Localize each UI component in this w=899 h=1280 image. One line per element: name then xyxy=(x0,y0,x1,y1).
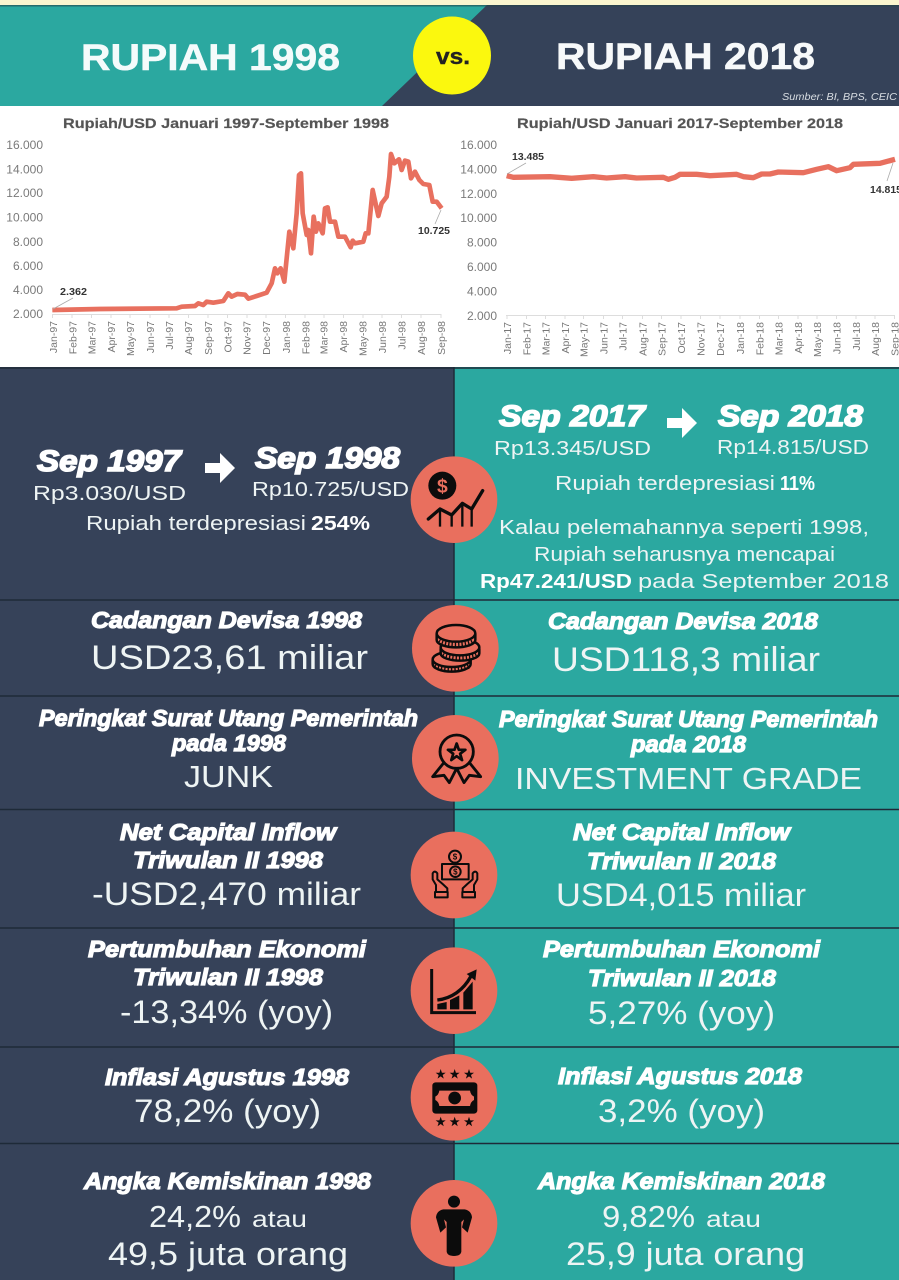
row: economic growth 1998: Triwulan II 1998 xyxy=(133,964,323,990)
y axis labels: 4.000 xyxy=(467,284,497,298)
x axis labels: Oct-17 xyxy=(676,322,688,354)
line chart: Rupiah/USD 2017-2018 xyxy=(460,115,899,357)
x axis labels: Dec-17 xyxy=(715,322,727,356)
callout: 10.725 xyxy=(418,210,450,237)
x axis labels xyxy=(48,321,448,356)
depreciation text: 11% xyxy=(780,473,815,495)
depreciation text xyxy=(86,513,370,535)
x axis labels: Jan-98 xyxy=(281,321,293,353)
row: reserves 2018: USD118,3 miliar xyxy=(552,641,820,679)
arrow xyxy=(667,408,697,438)
x axis labels: Jun-97 xyxy=(145,321,157,353)
row: capital inflow 1998: -USD2,470 miliar xyxy=(92,876,361,912)
row: poverty 1998: atau xyxy=(252,1206,307,1232)
row: reserves 1998: USD23,61 miliar xyxy=(91,639,368,677)
x axis labels: Aug-18 xyxy=(870,322,882,356)
callout: 10.725: 10.725 xyxy=(418,226,450,237)
row: poverty 1998: 49,5 juta orang xyxy=(108,1236,348,1272)
callout: 2.362 xyxy=(53,287,87,309)
row: reserves 2018: Cadangan Devisa 2018 xyxy=(548,608,818,634)
scenario text xyxy=(480,517,889,593)
row: debt rating 2018: Peringkat Surat Utang Pemerintah xyxy=(499,706,878,732)
x axis labels: Jul-18 xyxy=(851,322,863,351)
y axis labels: 8.000 xyxy=(13,235,43,249)
row: debt rating 1998: JUNK xyxy=(184,759,273,794)
x axis labels: Jan-97 xyxy=(48,321,60,353)
heading: Sep 2017: Sep 2017 xyxy=(499,400,646,433)
arrow xyxy=(205,453,235,483)
x axis labels: Dec-97 xyxy=(261,321,273,355)
x axis labels: Feb-18 xyxy=(754,322,766,355)
x axis labels: Mar-18 xyxy=(774,322,786,355)
data line xyxy=(52,154,442,310)
row: debt rating 1998 xyxy=(39,705,418,794)
callout: 13.485: 13.485 xyxy=(512,152,544,163)
chart title: Rupiah/USD Januari 2017-September 2018 xyxy=(517,115,843,131)
row: poverty 2018: 25,9 juta orang xyxy=(566,1236,805,1272)
row: debt rating 2018: INVESTMENT GRADE xyxy=(515,761,862,796)
icon: hands holding money: $ xyxy=(453,868,458,877)
row: capital inflow 2018 xyxy=(556,819,806,913)
x axis labels: Jun-17 xyxy=(598,322,610,354)
row: capital inflow 1998: Net Capital Inflow xyxy=(120,819,338,845)
row: capital inflow 1998: Triwulan II 1998 xyxy=(133,847,323,873)
y axis labels: 10.000 xyxy=(6,210,43,224)
row: debt rating 1998: Peringkat Surat Utang Pemerintah xyxy=(39,705,418,731)
x axis labels: May-18 xyxy=(812,322,824,357)
row: poverty 2018 xyxy=(537,1168,825,1272)
x axis labels: Sep-97 xyxy=(203,321,215,355)
row: debt rating 2018 xyxy=(499,706,878,796)
row: economic growth 1998: Pertumbuhan Ekonomi xyxy=(88,936,367,962)
y axis labels: 14.000 xyxy=(6,162,43,176)
y axis labels xyxy=(6,138,43,321)
icon: person with hands on hips xyxy=(411,1180,497,1267)
depreciation text: Rupiah terdepresiasi xyxy=(555,473,775,495)
header band xyxy=(0,5,899,106)
icon: hands holding money: $ xyxy=(453,852,458,861)
title: Rupiah 1998: RUPIAH 1998 xyxy=(81,37,340,78)
x axis labels: Jun-98 xyxy=(377,321,389,353)
icon: hands holding money xyxy=(411,832,497,918)
x axis labels: Mar-97 xyxy=(86,321,98,354)
scenario text: Rp47.241/USD xyxy=(480,571,632,593)
rate 1997: Rp3.030/USD xyxy=(33,483,186,505)
rate 2017: Rp13.345/USD xyxy=(494,438,651,460)
y axis labels: 14.000 xyxy=(460,162,497,176)
y axis labels: 4.000 xyxy=(13,283,43,297)
x axis labels: Oct-97 xyxy=(222,321,234,353)
x axis labels: Feb-17 xyxy=(522,322,534,355)
row: poverty 2018: atau xyxy=(706,1206,761,1232)
y axis labels: 12.000 xyxy=(6,186,43,200)
icon: award ribbon with star xyxy=(412,715,499,802)
depreciation text: 254% xyxy=(311,513,370,535)
row: poverty 2018: Angka Kemiskinan 2018 xyxy=(537,1168,825,1194)
row: debt rating 1998: pada 1998 xyxy=(171,730,286,756)
row: capital inflow 1998 xyxy=(92,819,361,912)
rate 2018: Rp14.815/USD xyxy=(717,437,869,459)
x axis labels: Feb-98 xyxy=(300,321,312,354)
row: inflation 2018: Inflasi Agustus 2018 xyxy=(558,1063,802,1089)
scenario text: pada September 2018 xyxy=(638,571,889,593)
icon: stack of coins xyxy=(412,605,499,692)
row: capital inflow 2018: Triwulan II 2018 xyxy=(587,848,776,874)
line chart: Rupiah/USD 1997-1998 xyxy=(6,115,450,356)
callout: 13.485 xyxy=(507,152,544,174)
panel: 2018 background xyxy=(454,367,899,1280)
x axis labels: Jun-18 xyxy=(832,322,844,354)
row: reserves 1998 xyxy=(91,607,368,677)
x axis labels: Jul-97 xyxy=(164,321,176,350)
y axis labels: 8.000 xyxy=(467,236,497,250)
y axis labels: 10.000 xyxy=(460,211,497,225)
y axis labels: 2.000 xyxy=(13,307,43,321)
x axis labels: Aug-97 xyxy=(183,321,195,355)
callout: 14.815 xyxy=(870,163,899,196)
y axis labels: 12.000 xyxy=(460,187,497,201)
row: inflation 1998: Inflasi Agustus 1998 xyxy=(105,1064,349,1090)
x axis labels: Sep-17 xyxy=(656,322,668,356)
row: poverty 1998 xyxy=(83,1168,371,1272)
x axis labels xyxy=(502,322,899,357)
x axis xyxy=(506,315,895,319)
row: economic growth 2018: 5,27% (yoy) xyxy=(588,995,775,1031)
chart title: Rupiah/USD Januari 1997-September 1998 xyxy=(63,115,389,131)
row: poverty 2018: 9,82% xyxy=(602,1199,695,1234)
x axis labels: Apr-97 xyxy=(106,321,118,353)
row: reserves 2018 xyxy=(548,608,820,679)
icon: dollar with growth line: $ xyxy=(437,476,448,497)
row: poverty 1998: Angka Kemiskinan 1998 xyxy=(83,1168,371,1194)
row: poverty 1998: 24,2% xyxy=(149,1199,241,1234)
row: debt rating 2018: pada 2018 xyxy=(630,731,746,757)
scenario text: Kalau pelemahannya seperti 1998, xyxy=(499,517,869,539)
x axis labels: Aug-98 xyxy=(416,321,428,355)
y axis labels: 16.000 xyxy=(460,138,497,152)
icon: banknote with stars xyxy=(411,1054,497,1141)
x axis labels: Apr-98 xyxy=(338,321,350,353)
row: economic growth 2018: Triwulan II 2018 xyxy=(588,965,776,991)
row: exchange rate 1998 xyxy=(33,442,409,535)
row: capital inflow 2018: USD4,015 miliar xyxy=(556,877,806,913)
y axis labels: 6.000 xyxy=(13,259,43,273)
y axis labels xyxy=(460,138,497,323)
y axis labels: 16.000 xyxy=(6,138,43,152)
versus badge: vs. xyxy=(436,44,470,69)
title: Rupiah 2018: RUPIAH 2018 xyxy=(556,36,815,77)
x axis labels: Mar-98 xyxy=(318,321,330,354)
data line xyxy=(507,159,895,179)
heading: Sep 2018: Sep 2018 xyxy=(718,400,863,433)
y axis labels: 2.000 xyxy=(467,309,497,323)
x axis labels: Jan-18 xyxy=(735,322,747,354)
depreciation text: Rupiah terdepresiasi xyxy=(86,513,306,535)
heading: Sep 1997: Sep 1997 xyxy=(37,445,182,478)
x axis labels: Aug-17 xyxy=(638,322,650,356)
x axis labels: Apr-17 xyxy=(560,322,572,354)
x axis labels: Feb-97 xyxy=(68,321,80,354)
x axis labels: Mar-17 xyxy=(540,322,552,355)
row: economic growth 1998: -13,34% (yoy) xyxy=(120,994,333,1030)
rate 1998: Rp10.725/USD xyxy=(252,479,409,501)
x axis labels: Jul-17 xyxy=(618,322,630,351)
x axis labels: Jan-17 xyxy=(502,322,514,354)
callout: 2.362: 2.362 xyxy=(60,287,87,298)
row: economic growth 1998 xyxy=(88,936,367,1030)
row: inflation 2018 xyxy=(558,1063,802,1129)
row: economic growth 2018: Pertumbuhan Ekonomi xyxy=(543,936,821,962)
x axis labels: May-98 xyxy=(358,321,370,356)
x axis labels: May-97 xyxy=(125,321,137,356)
row: economic growth 2018 xyxy=(543,936,821,1031)
scenario text: Rupiah seharusnya mencapai xyxy=(534,544,835,566)
row: reserves 1998: Cadangan Devisa 1998 xyxy=(91,607,362,633)
x axis labels: May-17 xyxy=(578,322,590,357)
x axis labels: Sep-98 xyxy=(436,321,448,355)
versus badge xyxy=(413,16,491,94)
x axis labels: Nov-97 xyxy=(242,321,254,355)
row: inflation 2018: 3,2% (yoy) xyxy=(598,1093,765,1129)
row: inflation 1998 xyxy=(105,1064,349,1129)
row: inflation 1998: 78,2% (yoy) xyxy=(134,1093,321,1129)
x axis labels: Nov-17 xyxy=(696,322,708,356)
source note: Sumber: BI, BPS, CEIC xyxy=(782,91,897,103)
y axis labels: 6.000 xyxy=(467,260,497,274)
x axis xyxy=(52,314,441,318)
icon: dollar with growth line xyxy=(411,456,497,543)
row: exchange rate 2018 xyxy=(480,400,889,593)
x axis labels: Apr-18 xyxy=(793,322,805,354)
row: capital inflow 2018: Net Capital Inflow xyxy=(573,819,792,845)
x axis labels: Jul-98 xyxy=(396,321,408,350)
heading: Sep 1998: Sep 1998 xyxy=(255,442,400,475)
icon: growth chart with arrow xyxy=(411,947,497,1034)
panel: 1998 background xyxy=(0,367,454,1280)
